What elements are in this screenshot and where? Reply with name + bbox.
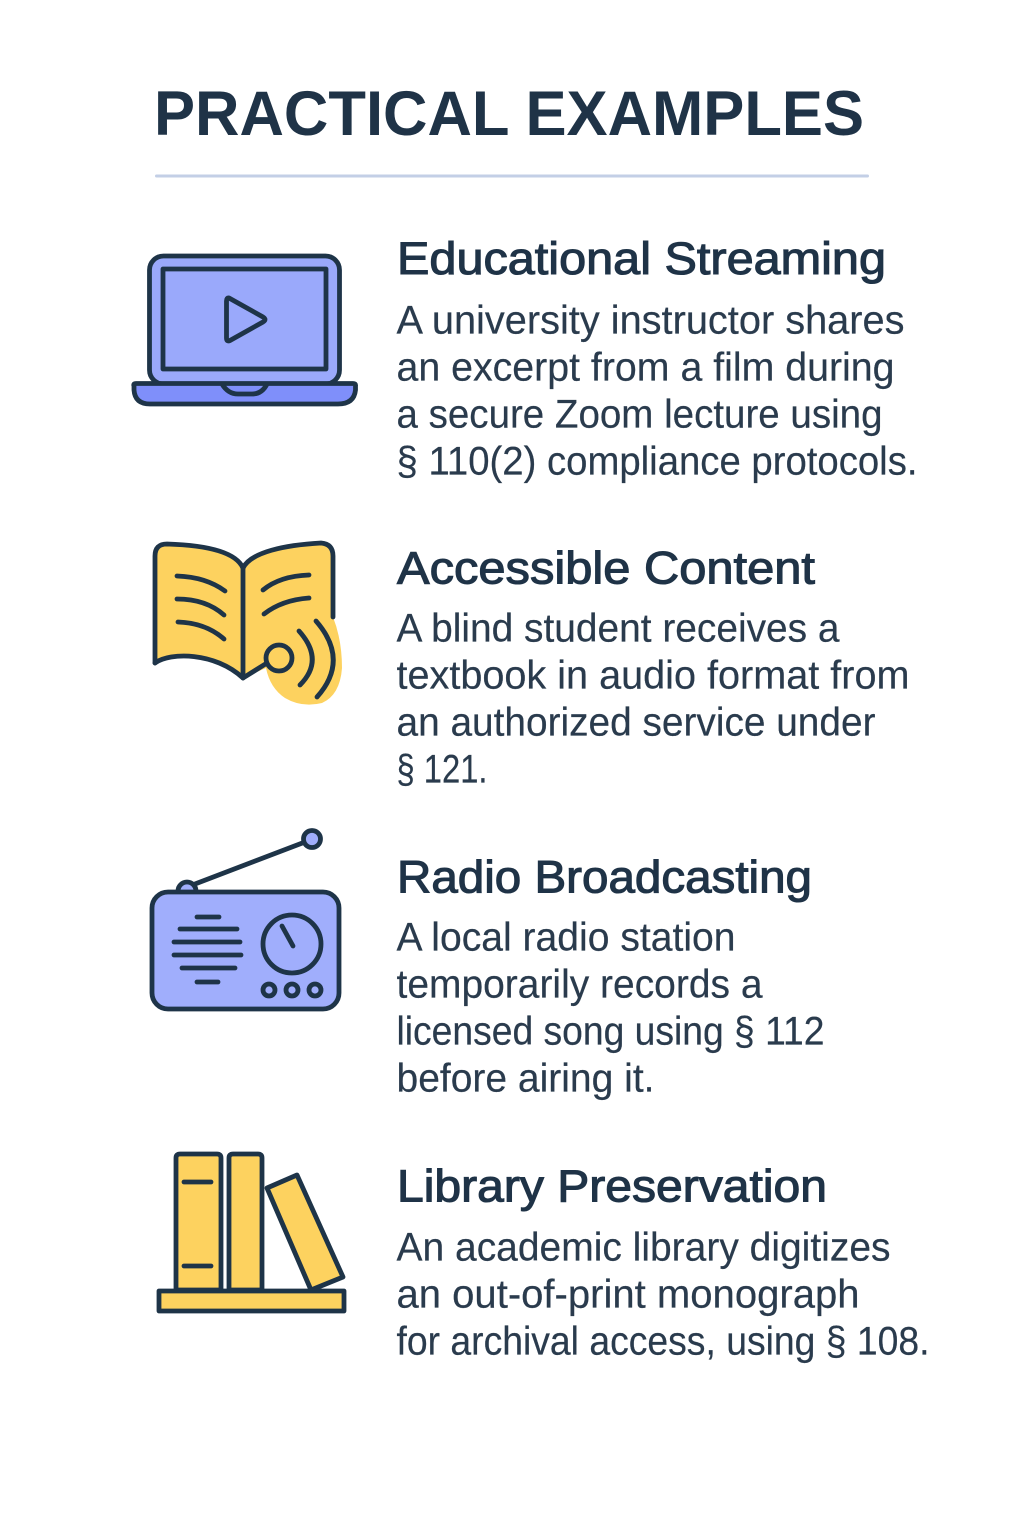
description bbox=[396, 1226, 930, 1364]
description: A university instructor shares bbox=[396, 298, 904, 342]
panel: radio broadcasting bbox=[152, 830, 824, 1100]
heading: Accessible Content bbox=[397, 542, 816, 594]
description: a secure Zoom lecture using bbox=[396, 392, 882, 436]
description: § 110(2) compliance protocols. bbox=[396, 440, 918, 484]
description: an out-of-print monograph bbox=[396, 1272, 860, 1316]
heading: Library Preservation bbox=[397, 1160, 827, 1212]
title underline bbox=[155, 174, 869, 178]
description: A blind student receives a bbox=[396, 606, 840, 650]
description bbox=[396, 298, 918, 484]
description: an authorized service under bbox=[396, 700, 876, 744]
icon: laptop with play button bbox=[134, 256, 356, 404]
heading: Radio Broadcasting bbox=[397, 852, 812, 902]
description bbox=[396, 606, 910, 792]
description: temporarily records a bbox=[396, 962, 763, 1006]
panel: accessible content bbox=[155, 542, 910, 792]
icon: books on shelf bbox=[159, 1154, 344, 1311]
description: licensed song using § 112 bbox=[396, 1010, 824, 1054]
description: textbook in audio format from bbox=[396, 654, 910, 698]
description: before airing it. bbox=[396, 1056, 654, 1100]
description: An academic library digitizes bbox=[396, 1226, 890, 1270]
title: PRACTICAL EXAMPLES bbox=[154, 79, 864, 149]
description: an excerpt from a film during bbox=[396, 346, 894, 390]
panel: library preservation bbox=[159, 1154, 930, 1364]
icon: radio bbox=[152, 830, 339, 1009]
description: A local radio station bbox=[396, 916, 736, 960]
description: § 121. bbox=[396, 748, 488, 792]
description: for archival access, using § 108. bbox=[396, 1320, 930, 1364]
description bbox=[396, 916, 824, 1100]
icon: open book with audio waves bbox=[155, 543, 342, 705]
panel: educational streaming bbox=[134, 233, 918, 484]
heading: Educational Streaming bbox=[397, 233, 886, 284]
